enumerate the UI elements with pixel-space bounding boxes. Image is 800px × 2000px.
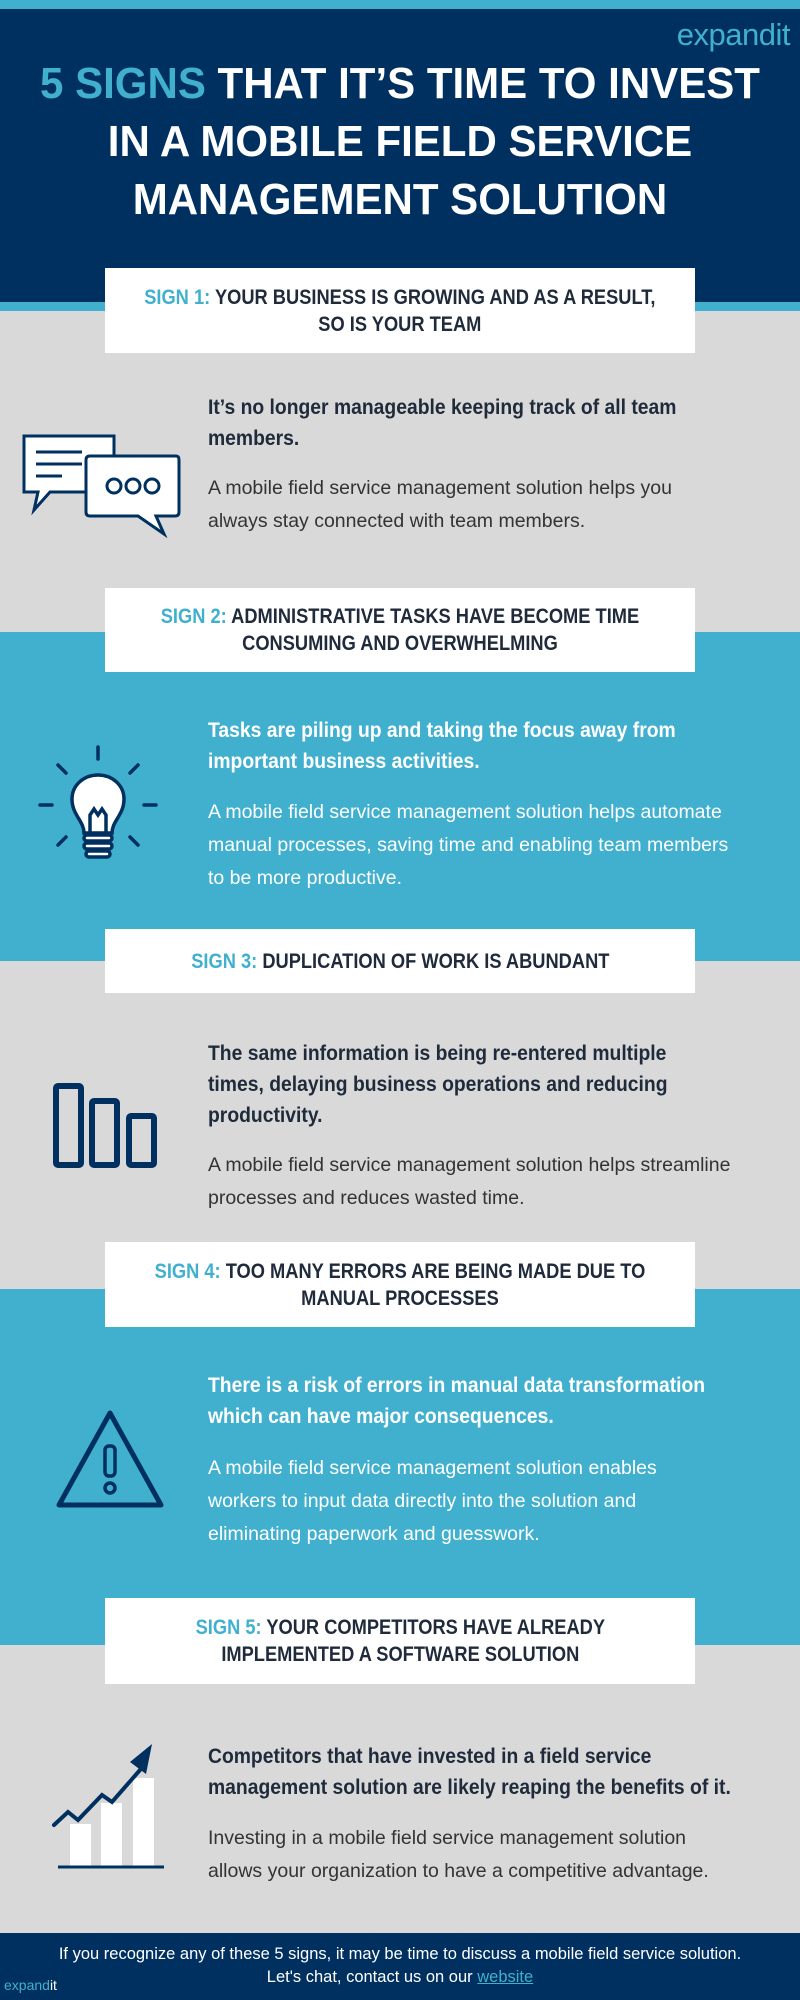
sign 5 body: allows your organization to have a competitive advantage.	[208, 1860, 709, 1882]
sign 2 bold text: Tasks are piling up and taking the focus away from	[208, 719, 676, 742]
sign 1 body	[208, 477, 672, 532]
sign 3 bold text	[208, 1042, 667, 1127]
footer logo: expandit	[4, 1977, 57, 1993]
sign 5 bold text: management solution are likely reaping the benefits of it.	[208, 1776, 731, 1799]
sign 1 bold text	[208, 396, 676, 450]
footer	[0, 1933, 800, 2000]
sign 3 body: A mobile field service management solution helps streamline	[208, 1154, 730, 1176]
sign 3 bold text: productivity.	[208, 1104, 322, 1127]
icon: growth chart	[52, 1744, 164, 1868]
section 4 background	[0, 1289, 800, 1645]
sign 3 body	[208, 1154, 730, 1209]
sign 5 bold text: Competitors that have invested in a field service	[208, 1745, 651, 1768]
sign 3 bold text: times, delaying business operations and reducing	[208, 1073, 667, 1096]
sign 4 body: eliminating paperwork and guesswork.	[208, 1523, 540, 1545]
sign 1 heading: SIGN 1: YOUR BUSINESS IS GROWING AND AS A RESULT,	[144, 286, 656, 308]
sign 3 heading: SIGN 3: DUPLICATION OF WORK IS ABUNDANT	[191, 950, 609, 972]
sign 2 heading: CONSUMING AND OVERWHELMING	[242, 632, 558, 655]
sign 1 body: always stay connected with team members.	[208, 510, 585, 532]
icon: bars	[53, 1083, 157, 1168]
sign 4 body: workers to input data directly into the solution and	[208, 1490, 636, 1512]
sign 2 body: A mobile field service management solution helps automate	[208, 801, 722, 823]
cyan stripe	[0, 302, 800, 311]
sign 4 bold text: There is a risk of errors in manual data transformation	[208, 1374, 705, 1397]
sign 2 body: manual processes, saving time and enabling team members	[208, 834, 728, 856]
logo: expandit	[677, 17, 790, 52]
footer text	[59, 1945, 741, 1986]
footer text: Let's chat, contact us on our website	[267, 1968, 533, 1986]
sign 3 bold text: The same information is being re-entered multiple	[208, 1042, 666, 1065]
title	[40, 59, 760, 224]
sign 4 bold text	[208, 1374, 705, 1428]
sign 2 heading: SIGN 2: ADMINISTRATIVE TASKS HAVE BECOME TIME	[161, 605, 639, 628]
sign 3 body: processes and reduces wasted time.	[208, 1187, 524, 1209]
sign 4 bold text: which can have major consequences.	[208, 1405, 554, 1428]
top stripe	[0, 0, 800, 9]
sign 2 bold text: important business activities.	[208, 750, 480, 773]
title: 5 SIGNS THAT IT’S TIME TO INVEST	[40, 59, 760, 108]
sign 1 body: A mobile field service management solution helps you	[208, 477, 672, 499]
sign 5 bold text	[208, 1745, 731, 1799]
sign 4 heading	[105, 1242, 695, 1327]
title: IN A MOBILE FIELD SERVICE	[108, 117, 692, 166]
sign 2 bold text	[208, 719, 676, 773]
sign 4 body	[208, 1457, 657, 1545]
sign 4 body: A mobile field service management solution enables	[208, 1457, 657, 1479]
sign 3 heading	[105, 929, 695, 993]
icon: lightbulb	[38, 745, 158, 859]
icon: warning triangle	[56, 1410, 164, 1508]
section 2 background	[0, 632, 800, 961]
sign 1 bold text: It’s no longer manageable keeping track of all team	[208, 396, 676, 419]
sign 5 heading	[105, 1598, 695, 1684]
sign 5 heading: IMPLEMENTED A SOFTWARE SOLUTION	[221, 1643, 579, 1666]
sign 2 heading	[105, 588, 695, 672]
title: MANAGEMENT SOLUTION	[133, 175, 667, 224]
sign 1 heading	[105, 268, 695, 353]
sign 4 heading: MANUAL PROCESSES	[301, 1286, 499, 1310]
sign 2 body: to be more productive.	[208, 867, 402, 889]
footer text: If you recognize any of these 5 signs, it may be time to discuss a mobile field service solution.	[59, 1945, 741, 1963]
sign 5 heading: SIGN 5: YOUR COMPETITORS HAVE ALREADY	[195, 1616, 605, 1639]
sign 2 body	[208, 801, 728, 889]
icon: chat bubbles	[22, 434, 180, 538]
header panel	[0, 9, 800, 302]
sign 5 body	[208, 1827, 709, 1882]
sign 5 body: Investing in a mobile field service management solution	[208, 1827, 686, 1849]
sign 4 heading: SIGN 4: TOO MANY ERRORS ARE BEING MADE DUE TO	[155, 1260, 645, 1282]
sign 1 heading: SO IS YOUR TEAM	[318, 312, 482, 336]
sign 1 bold text: members.	[208, 427, 299, 450]
